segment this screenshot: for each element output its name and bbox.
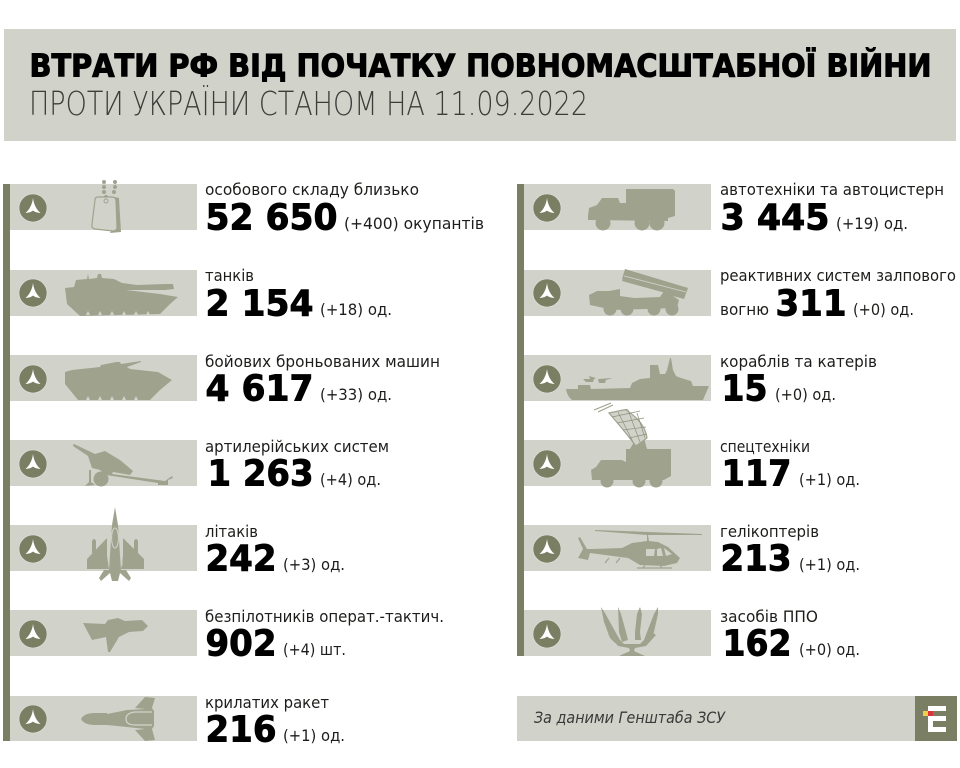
value: 216 bbox=[206, 709, 276, 750]
change: (+1) од. bbox=[283, 726, 345, 745]
label: гелікоптерів bbox=[720, 522, 819, 541]
change: (+33) од. bbox=[320, 385, 392, 404]
row: rocket launchers bbox=[524, 266, 956, 324]
icon: truck bbox=[588, 189, 675, 230]
value: 3 445 bbox=[720, 197, 830, 238]
value: 2 154 bbox=[206, 283, 314, 324]
subtitle: ПРОТИ УКРАЇНИ СТАНОМ НА 11.09.2022 bbox=[29, 84, 588, 123]
icon: warship bbox=[566, 358, 709, 400]
label continued: вогню bbox=[720, 300, 769, 319]
change: (+1) од. bbox=[799, 470, 860, 489]
label: особового складу близько bbox=[205, 180, 419, 199]
change: (+4) од. bbox=[320, 470, 381, 489]
icon: armoured vehicle bbox=[65, 361, 172, 400]
row: air defence bbox=[524, 607, 860, 664]
row: special equipment bbox=[524, 403, 860, 494]
value: 213 bbox=[720, 538, 792, 579]
value: 4 617 bbox=[206, 368, 314, 409]
row: tanks bbox=[10, 266, 392, 324]
icon: fighter jet bbox=[87, 507, 144, 581]
icon: helicopter bbox=[578, 530, 702, 568]
row: personnel bbox=[10, 180, 484, 238]
header panel bbox=[4, 29, 956, 141]
value: 902 bbox=[206, 623, 276, 664]
value: 162 bbox=[722, 623, 792, 664]
row: drones bbox=[10, 607, 444, 664]
value: 1 263 bbox=[208, 453, 314, 494]
icon: tank bbox=[65, 274, 178, 316]
label: автотехніки та автоцистерн bbox=[720, 180, 944, 199]
label: танків bbox=[205, 266, 254, 285]
row: trucks bbox=[524, 180, 944, 238]
row: artillery bbox=[10, 437, 389, 494]
change: (+0) од. bbox=[775, 385, 836, 404]
label: крилатих ракет bbox=[205, 693, 329, 712]
icon: radar truck bbox=[591, 403, 671, 488]
change: (+0) од. bbox=[799, 640, 860, 659]
icon: artillery gun bbox=[73, 444, 173, 486]
change: (+19) од. bbox=[836, 214, 908, 233]
value: 15 bbox=[722, 368, 768, 409]
label: бойових броньованих машин bbox=[205, 352, 440, 371]
icon: air defence missiles bbox=[601, 607, 658, 656]
left column timeline bar bbox=[3, 184, 10, 741]
change: (+400) окупантів bbox=[344, 214, 484, 233]
label: артилерійських систем bbox=[205, 437, 389, 456]
row: helicopters bbox=[524, 522, 860, 579]
value: 52 650 bbox=[206, 197, 338, 238]
change: (+3) од. bbox=[283, 555, 345, 574]
icon: dog tags bbox=[92, 180, 121, 233]
logo bbox=[915, 696, 957, 741]
change: (+1) од. bbox=[799, 555, 860, 574]
label: засобів ППО bbox=[720, 607, 818, 626]
value: 242 bbox=[206, 538, 276, 579]
row: aircraft bbox=[10, 507, 345, 581]
value: 117 bbox=[722, 453, 792, 494]
source text: За даними Генштаба ЗСУ bbox=[534, 708, 726, 727]
value: 311 bbox=[776, 283, 846, 324]
row: armoured vehicles bbox=[10, 352, 440, 409]
row: ships bbox=[524, 352, 877, 409]
change: (+0) од. bbox=[853, 300, 914, 319]
icon: drone bbox=[83, 618, 148, 652]
source footer bbox=[517, 696, 957, 741]
icon: cruise missile bbox=[81, 697, 155, 741]
label: літаків bbox=[205, 522, 258, 541]
right column timeline bar bbox=[517, 184, 524, 656]
change: (+4) шт. bbox=[283, 640, 346, 659]
label: кораблів та катерів bbox=[720, 352, 877, 371]
change: (+18) од. bbox=[320, 300, 392, 319]
icon: rocket launcher bbox=[589, 269, 688, 316]
row: cruise missiles bbox=[10, 693, 345, 750]
label: безпілотників операт.-тактич. bbox=[205, 607, 444, 626]
label: спецтехніки bbox=[720, 437, 810, 456]
